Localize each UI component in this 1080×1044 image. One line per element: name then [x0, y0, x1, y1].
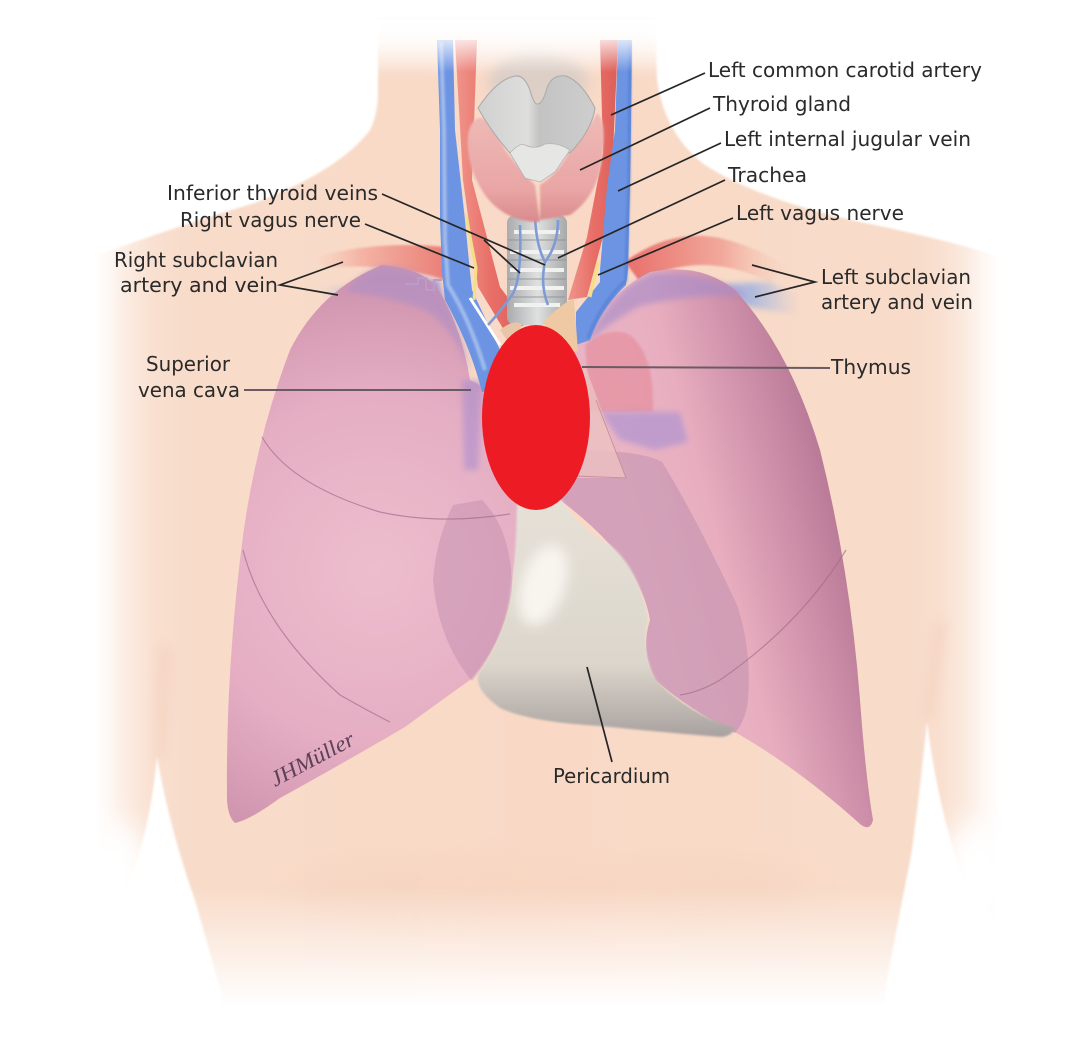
- neck soft background: [488, 54, 588, 110]
- heart shadow through right lung: [433, 500, 512, 681]
- gap between right arm and torso: [118, 758, 218, 989]
- label: left subclavian artery and vein: [821, 265, 973, 314]
- label: inferior thyroid veins: Inferior thyroid veins: [167, 181, 378, 205]
- artist signature: JHMüller: [266, 726, 359, 791]
- label: left vagus nerve: Left vagus nerve: [736, 201, 904, 225]
- thyroid cartilage: [478, 76, 595, 153]
- vagus nerve, right: [466, 215, 476, 300]
- thymus upper lobes: [543, 298, 578, 352]
- heart shadow through left lung: [560, 450, 749, 733]
- subclavian vessels, left side of body: [625, 236, 800, 316]
- pericardium highlight: [509, 538, 577, 632]
- label: pericardium: Pericardium: [553, 764, 670, 788]
- pericardium: [478, 498, 735, 737]
- leader lines: [280, 73, 815, 762]
- label: superior vena cava: [138, 352, 240, 402]
- gap between left arm and torso: [887, 724, 976, 989]
- internal jugular vein and brachiocephalic, right: [437, 40, 500, 392]
- label: right subclavian artery and vein: [114, 248, 278, 297]
- lung notch, right: [405, 278, 442, 290]
- trachea: [507, 215, 567, 325]
- label: left subclavian artery and vein: Left subclavian: [821, 265, 971, 289]
- pink aortic area: [585, 332, 653, 412]
- thyroid gland: [468, 113, 604, 222]
- left lung (viewer right): [560, 269, 873, 827]
- carotid artery, right: [455, 40, 527, 335]
- pulmonary vessel through lung: [600, 412, 688, 450]
- inferior thyroid veins: [488, 216, 558, 325]
- leader lines over lung: [244, 367, 830, 390]
- subclavian vessels, right side of body: [313, 245, 445, 308]
- arm fade: [104, 816, 989, 905]
- label: superior vena cava: Superior: [146, 352, 231, 376]
- carotid artery, left: [568, 40, 618, 300]
- lung fissures: [243, 437, 846, 722]
- label: right subclavian artery and vein: artery and vein: [120, 273, 278, 297]
- armpit shading: [161, 628, 942, 705]
- label: right subclavian artery and vein: Right subclavian: [114, 248, 278, 272]
- label: thymus: Thymus: [830, 355, 911, 379]
- anatomical illustration: thorax and neck: [104, 40, 990, 990]
- label: trachea: Trachea: [727, 163, 807, 187]
- svc purple shadow: [462, 380, 482, 470]
- label: thyroid gland: Thyroid gland: [712, 92, 851, 116]
- blocked out area: red ellipse: [482, 325, 590, 510]
- upper lung purple overlay, right: [345, 266, 472, 375]
- cricoid cartilage: [510, 144, 570, 182]
- upper lung purple overlay, left: [585, 273, 748, 345]
- label: right vagus nerve: Right vagus nerve: [180, 208, 361, 232]
- thymus lower lobe: [560, 365, 626, 478]
- label: left common carotid artery: Left common carotid artery: [708, 58, 982, 82]
- label: left subclavian artery and vein: artery and vein: [821, 290, 973, 314]
- internal jugular vein and brachiocephalic, left: [576, 40, 632, 345]
- torso and neck skin: [104, 44, 990, 990]
- right lung (viewer left): [227, 265, 525, 823]
- fade at top of neck: [370, 20, 665, 72]
- label: left internal jugular vein: Left internal jugular vein: [724, 127, 971, 151]
- vagus nerve, left: [590, 262, 598, 297]
- label: superior vena cava: vena cava: [138, 378, 240, 402]
